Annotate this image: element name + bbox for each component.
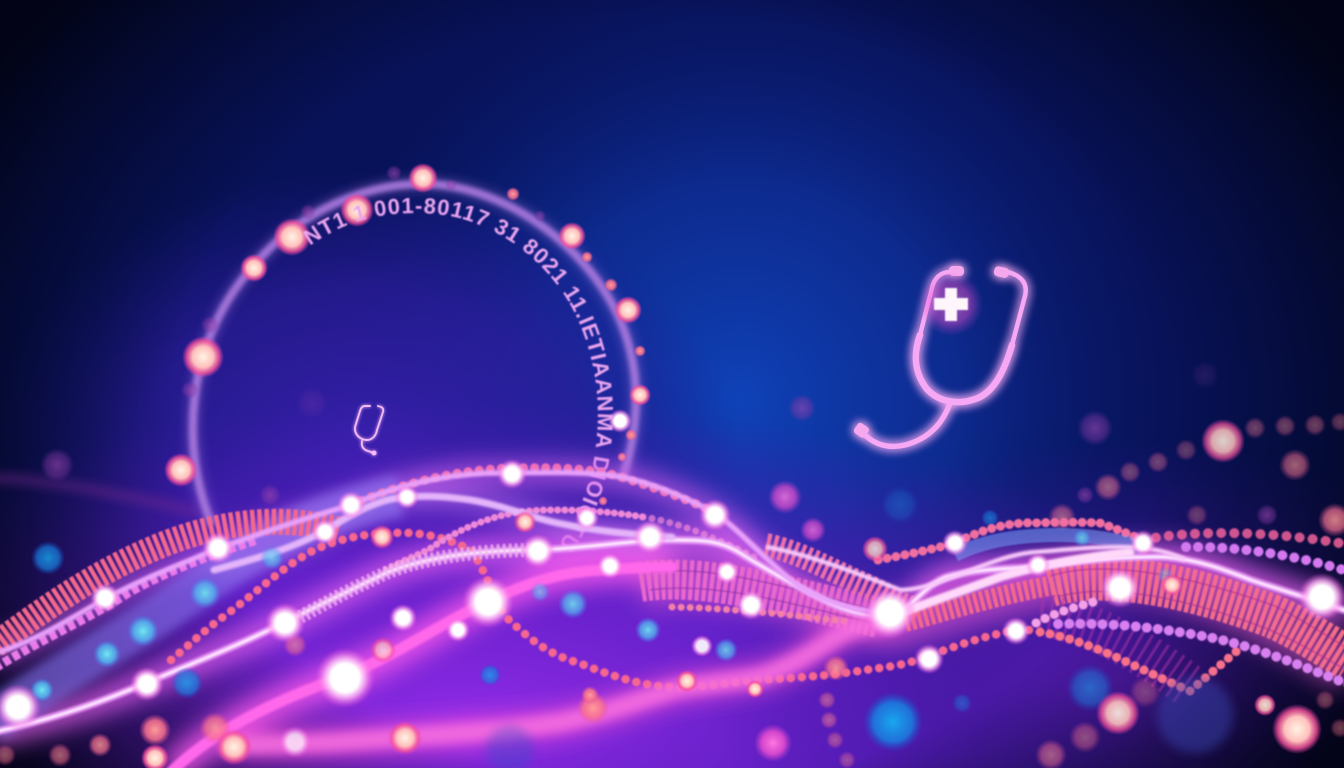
lower right of mid arc — [643, 517, 760, 560]
red dotted strands — [171, 533, 1036, 687]
dotted texture on main strand — [300, 550, 536, 617]
data wave ribbons — [0, 468, 1344, 768]
lilac dotted strands — [1036, 600, 1100, 623]
upper right strands — [878, 522, 1143, 560]
top dotted strand — [351, 468, 715, 513]
data ring — [164, 163, 651, 546]
middle grid ribbon — [640, 580, 880, 618]
right red grid ribbon — [905, 584, 1060, 622]
ring binary text: NT1 1 001-80117 31 8021 11.IETIAANMA DIOIOTU — [302, 197, 614, 546]
medical cross — [919, 272, 983, 336]
foreground bokeh lights — [0, 529, 1344, 768]
far blurred wave at left — [0, 478, 200, 512]
left red comb — [0, 522, 340, 645]
ring lights — [164, 163, 651, 506]
small stethoscope icon — [355, 406, 383, 455]
chest piece — [853, 422, 870, 439]
large stethoscope icon — [853, 266, 1026, 446]
earpieces — [949, 266, 964, 276]
crisp textured strands — [0, 468, 1344, 691]
lavender band — [0, 496, 400, 722]
white strand lines — [766, 547, 1185, 590]
soft glows under ribbons — [0, 472, 1344, 768]
main bright strands — [0, 472, 1344, 768]
background bokeh lights — [31, 361, 1344, 575]
mid dotted arc — [386, 510, 643, 570]
bright node lights — [0, 459, 1344, 765]
